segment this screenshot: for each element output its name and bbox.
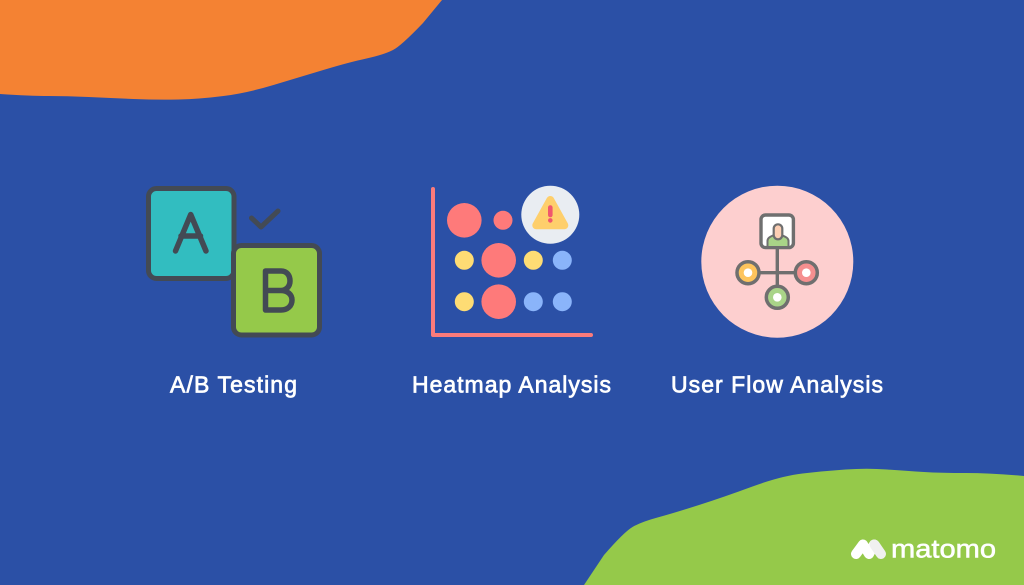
icon: heatmap chart [433,186,591,335]
check mark [252,211,278,227]
warning badge [521,186,579,244]
logo wordmark: matomo [891,534,996,564]
right node [795,262,817,284]
green corner blob [584,469,1024,585]
A card [148,188,234,278]
icon: A/B testing [148,188,320,335]
bottom node [766,286,788,308]
label: Heatmap Analysis: Heatmap Analysis [412,372,611,398]
flow connectors [748,248,806,297]
B card [234,246,320,335]
logo mark [856,544,881,554]
pink background circle [701,186,853,338]
heatmap dots [447,203,572,319]
orange corner blob [0,0,442,100]
user card [761,215,793,248]
left node [737,262,759,284]
icon: user flow [701,186,853,338]
matomo logo [856,534,996,564]
label: A/B Testing: A/B Testing [170,372,297,398]
label: User Flow Analysis: User Flow Analysis [671,372,883,398]
chart axes [433,189,591,335]
